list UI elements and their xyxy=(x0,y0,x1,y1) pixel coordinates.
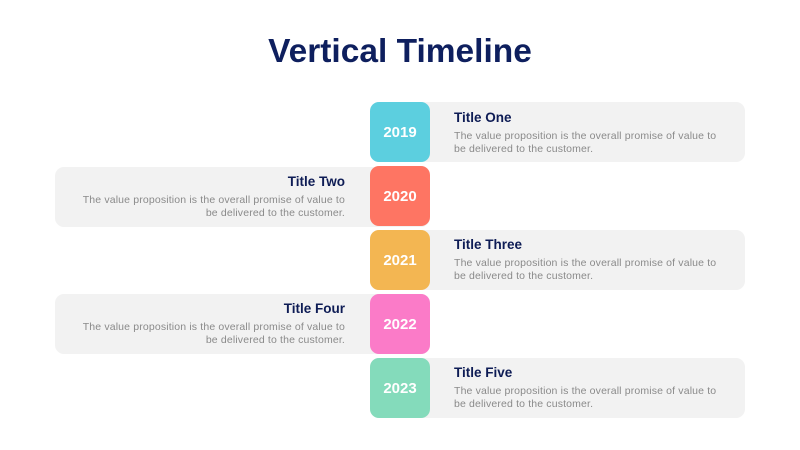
year 2020 xyxy=(370,166,430,226)
text: Title Five: The value proposition is the overall promise of value to be delivered to the customer. xyxy=(454,385,716,410)
text: Title Two: Title Two xyxy=(288,174,345,189)
text: Title Three xyxy=(454,237,716,282)
text: Title Four: Title Four xyxy=(284,301,345,316)
text: Title Five: Title Five xyxy=(454,365,512,380)
text: Title Three: Title Three xyxy=(454,237,522,252)
text: Title One: Title One xyxy=(454,110,512,125)
text: Title Four xyxy=(83,301,345,346)
year 2023 xyxy=(370,358,430,418)
text: Title Four: The value proposition is the overall promise of value to be delivered to the customer. xyxy=(83,321,345,346)
text: Title One xyxy=(454,110,716,155)
year 2022: 2022 xyxy=(383,316,417,332)
year 2019: 2019 xyxy=(383,124,417,140)
text: Title Three: The value proposition is the overall promise of value to be delivered to the customer. xyxy=(454,257,716,282)
year 2020: 2020 xyxy=(383,188,417,204)
text: Title Two: The value proposition is the overall promise of value to be delivered to the customer. xyxy=(83,194,345,219)
title: Vertical Timeline xyxy=(268,33,532,70)
text: Title Five xyxy=(454,365,716,410)
panel: 2022 xyxy=(55,294,430,354)
panel: 2021 xyxy=(370,230,745,290)
year 2023: 2023 xyxy=(383,380,417,396)
year 2019 xyxy=(370,102,430,162)
year 2022 xyxy=(370,294,430,354)
panel: 2020 xyxy=(55,167,430,227)
text: Title Two xyxy=(83,174,345,219)
panel: 2023 xyxy=(370,358,745,418)
panel: 2019 xyxy=(370,102,745,162)
year 2021 xyxy=(370,230,430,290)
text: Title One: The value proposition is the overall promise of value to be delivered to the customer. xyxy=(454,130,716,155)
year 2021: 2021 xyxy=(383,252,417,268)
